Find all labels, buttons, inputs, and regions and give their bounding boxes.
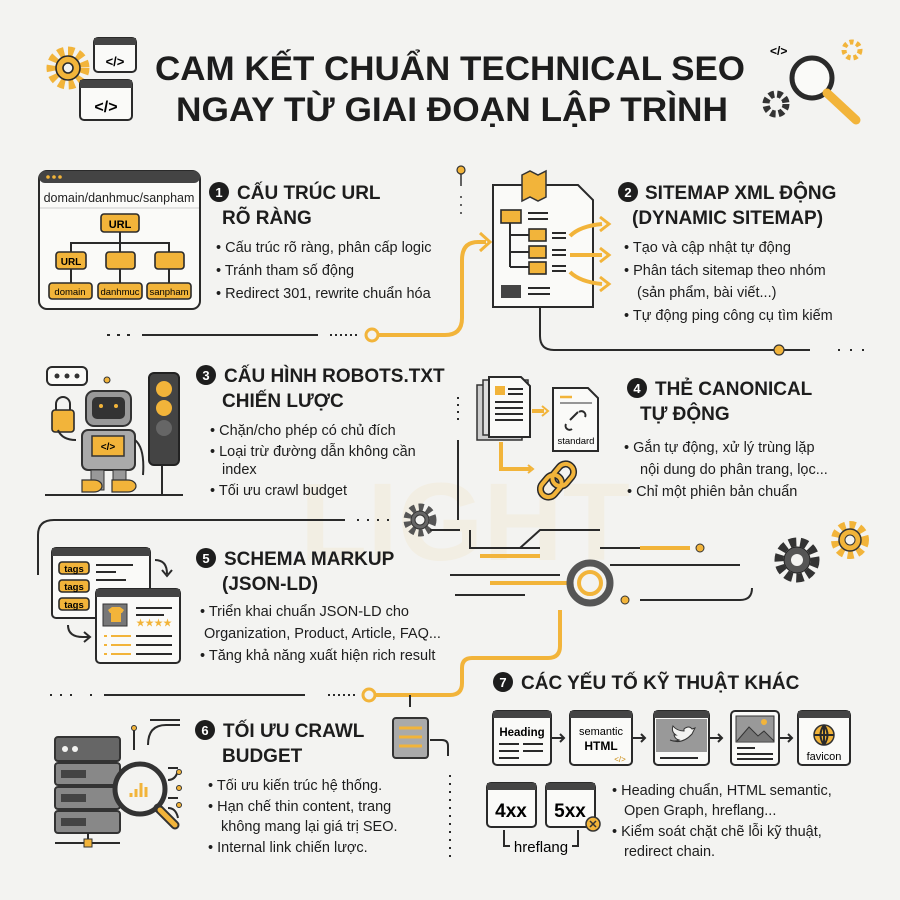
illustration: schema windows: tags bbox=[64, 600, 84, 611]
heading 6 bbox=[195, 720, 365, 767]
bullets 7: redirect chain. bbox=[624, 844, 715, 860]
heading 5 bbox=[196, 548, 395, 595]
bullets 3: index bbox=[222, 462, 257, 478]
connector: divider with gear bbox=[38, 507, 433, 575]
heading 1: RÕ RÀNG bbox=[222, 207, 312, 229]
heading 1: CẤU TRÚC URL bbox=[237, 182, 381, 204]
connector: divider 5 to 6 with orange path bbox=[50, 610, 560, 857]
icon row: heading, semantic, twitter, image, favicon: HTML bbox=[584, 739, 618, 753]
illustration: browser URL tree: danhmuc bbox=[100, 287, 140, 298]
panel: 1 URL structure bbox=[39, 171, 432, 309]
icon: 4xx 5xx hreflang bbox=[487, 783, 600, 856]
heading 3 bbox=[196, 365, 445, 412]
bullets 5: • Triển khai chuẩn JSON-LD cho bbox=[200, 604, 409, 620]
icon: 4xx 5xx hreflang: hreflang bbox=[514, 839, 568, 856]
heading 1 bbox=[209, 182, 381, 229]
title: NGAY TỪ GIAI ĐOẠN LẬP TRÌNH bbox=[176, 91, 728, 129]
bullets 2: • Phân tách sitemap theo nhóm bbox=[624, 263, 826, 279]
heading 4: THẺ CANONICAL bbox=[655, 378, 813, 400]
bullets 1: • Cấu trúc rõ ràng, phân cấp logic bbox=[216, 240, 431, 256]
bullets 1: • Redirect 301, rewrite chuẩn hóa bbox=[216, 286, 432, 302]
heading 2: (DYNAMIC SITEMAP) bbox=[632, 208, 823, 229]
illustration: browser URL tree: URL bbox=[61, 257, 81, 268]
illustration: robot and traffic light: </> bbox=[101, 442, 115, 453]
heading 5: 5 bbox=[202, 551, 210, 566]
heading 6: BUDGET bbox=[222, 746, 303, 767]
bullets 3: • Chặn/cho phép có chủ đích bbox=[210, 423, 396, 439]
heading 6: TỐI ƯU CRAWL bbox=[223, 720, 365, 742]
heading 5: SCHEMA MARKUP bbox=[224, 549, 395, 570]
illustration: canonical docs: standard bbox=[558, 436, 594, 447]
icon row: heading, semantic, twitter, image, favicon: semantic bbox=[579, 726, 624, 738]
heading 3: CHIẾN LƯỢC bbox=[222, 390, 344, 412]
heading 2 bbox=[618, 182, 836, 229]
illustration: schema windows: ★★★★ bbox=[136, 618, 172, 628]
illustration: schema windows: tags bbox=[64, 564, 84, 575]
heading 5: (JSON-LD) bbox=[222, 574, 318, 595]
bullets 1 bbox=[216, 240, 432, 302]
bullets 3: • Tối ưu crawl budget bbox=[210, 483, 347, 499]
panel: 6 crawl budget bbox=[55, 720, 398, 856]
illustration: canonical docs bbox=[458, 377, 598, 520]
illustration: robot and traffic light bbox=[45, 367, 183, 495]
bullets 7: Open Graph, hreflang... bbox=[624, 803, 776, 819]
icon: gear and code windows top-left: </> bbox=[94, 99, 118, 116]
illustration: server and magnifier bbox=[55, 720, 182, 847]
icon: magnifier and gears top-right: </> bbox=[770, 44, 787, 58]
heading 4 bbox=[627, 378, 813, 425]
heading 3: 3 bbox=[202, 368, 210, 383]
heading 4: 4 bbox=[633, 381, 641, 396]
icon row: heading, semantic, twitter, image, favicon: favicon bbox=[807, 751, 841, 763]
illustration: circuit network with gears bbox=[430, 525, 865, 604]
bullets 5 bbox=[200, 604, 441, 664]
illustration: schema windows bbox=[52, 548, 180, 663]
bullets 4: nội dung do phân trang, lọc... bbox=[640, 462, 828, 478]
bullets 7: • Kiểm soát chặt chẽ lỗi kỹ thuật, bbox=[612, 823, 822, 840]
heading 2: SITEMAP XML ĐỘNG bbox=[645, 182, 836, 204]
heading 7: 7 bbox=[499, 675, 507, 690]
heading 6: 6 bbox=[201, 723, 209, 738]
connector: divider 1 to sitemap bbox=[107, 166, 490, 341]
bullets 4: • Chỉ một phiên bản chuẩn bbox=[627, 484, 797, 500]
bullets 6: • Hạn chế thin content, trang bbox=[208, 799, 391, 815]
bullets 7: • Heading chuẩn, HTML semantic, bbox=[612, 783, 832, 799]
watermark: LIGHT bbox=[300, 461, 630, 584]
heading 3: CẤU HÌNH ROBOTS.TXT bbox=[224, 365, 445, 387]
icon: gear and code windows top-left bbox=[51, 38, 136, 120]
heading 2: 2 bbox=[624, 185, 632, 200]
bullets 2 bbox=[624, 240, 833, 324]
icon: 4xx 5xx hreflang: 4xx bbox=[495, 801, 527, 822]
icon: 4xx 5xx hreflang: 5xx bbox=[554, 801, 586, 822]
bullets 4: • Gắn tự động, xử lý trùng lặp bbox=[624, 439, 815, 456]
icon: gear and code windows top-left: </> bbox=[106, 54, 125, 69]
panel: 3 robots bbox=[45, 365, 445, 499]
title: CAM KẾT CHUẨN TECHNICAL SEO bbox=[155, 50, 745, 88]
bullets 5: • Tăng khả năng xuất hiện rich result bbox=[200, 648, 435, 664]
illustration: browser URL tree bbox=[39, 171, 200, 309]
bullets 2: (sản phẩm, bài viết...) bbox=[637, 285, 776, 301]
panel: 5 schema bbox=[52, 548, 441, 664]
bullets 2: • Tự động ping công cụ tìm kiếm bbox=[624, 308, 833, 324]
bullets 6: • Tối ưu kiến trúc hệ thống. bbox=[208, 778, 382, 794]
heading 1: 1 bbox=[215, 185, 223, 200]
illustration: schema windows: tags bbox=[64, 582, 84, 593]
bullets 3: • Loại trừ đường dẫn không cần bbox=[210, 443, 416, 460]
icon: magnifier and gears top-right bbox=[766, 42, 860, 120]
panel: 4 canonical bbox=[458, 377, 828, 520]
icon row: heading, semantic, twitter, image, favicon: Heading bbox=[499, 727, 545, 739]
icon row: heading, semantic, twitter, image, favicon bbox=[493, 711, 850, 765]
heading 4: TỰ ĐỘNG bbox=[640, 403, 730, 425]
panel: 2 sitemap bbox=[493, 171, 864, 355]
bullets 1: • Tránh tham số động bbox=[216, 263, 354, 279]
illustration: browser URL tree: sanpham bbox=[149, 287, 189, 298]
illustration: browser URL tree: domain bbox=[54, 287, 86, 298]
title bbox=[155, 50, 745, 129]
panel: 7 other technical factors bbox=[487, 672, 850, 860]
bullets 3 bbox=[210, 423, 416, 499]
bullets 4 bbox=[624, 439, 828, 500]
bullets 6 bbox=[208, 778, 398, 856]
bullets 5: Organization, Product, Article, FAQ... bbox=[204, 626, 441, 642]
bullets 2: • Tạo và cập nhật tự động bbox=[624, 240, 791, 256]
illustration: browser URL tree: domain/danhmuc/sanpham bbox=[44, 191, 194, 205]
bullets 6: không mang lại giá trị SEO. bbox=[221, 819, 398, 835]
bullets 6: • Internal link chiến lược. bbox=[208, 840, 368, 856]
illustration: sitemap document bbox=[493, 171, 864, 355]
bullets 7 bbox=[612, 783, 832, 860]
icon row: heading, semantic, twitter, image, favicon: </> bbox=[614, 755, 626, 764]
illustration: browser URL tree: URL bbox=[109, 219, 132, 231]
heading 7: CÁC YẾU TỐ KỸ THUẬT KHÁC bbox=[521, 672, 800, 694]
